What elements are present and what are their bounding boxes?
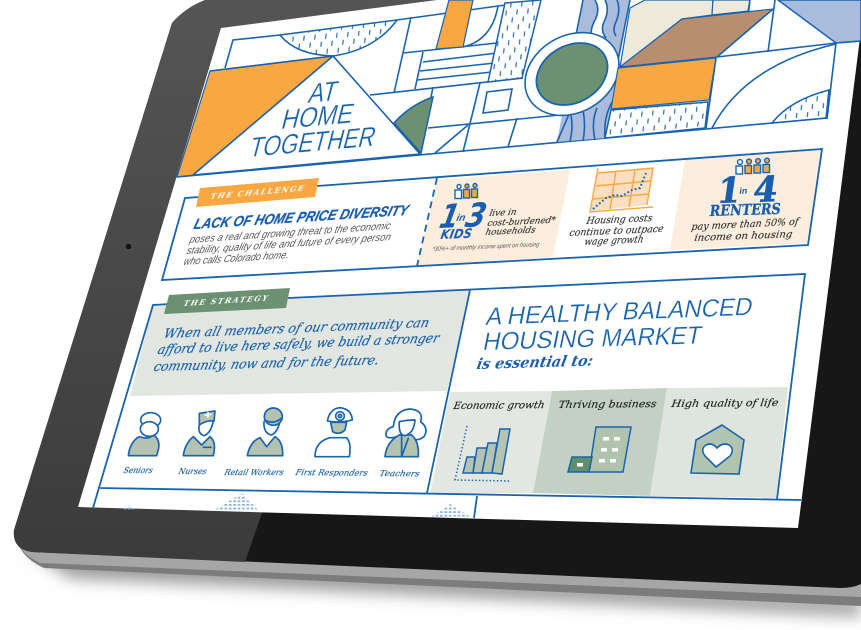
challenge heading: LACK OF HOME PRICE DIVERSITY (192, 203, 411, 233)
circle with green centre (510, 16, 634, 132)
stat: 1 in 3 kids: KIDS (439, 227, 473, 243)
cream walls (620, 0, 750, 67)
stat: 1 in 3 kids (436, 196, 490, 243)
panel: the strategy (93, 274, 805, 518)
stat: 1 in 4 renters: in (739, 186, 748, 196)
people labels: First Responders (294, 467, 369, 478)
strategy statement: afford to live here safely, we build a stronger (156, 331, 442, 358)
challenge body: stability, quality of life and future of every person (185, 231, 393, 257)
essential to: is essential to: (475, 352, 595, 373)
chart: housing costs vs wages (590, 168, 653, 212)
challenge body (182, 220, 393, 268)
text: cost-burdened households (484, 208, 557, 238)
essential labels: Economic growth (451, 400, 546, 412)
people labels: Teachers (379, 468, 421, 478)
text: pay more than 50 percent (691, 217, 801, 244)
icon: nurse (183, 411, 215, 456)
badge: the strategy (164, 288, 290, 314)
strategy sage panel (130, 290, 470, 396)
tan roof (620, 9, 773, 67)
strategy statement: community, now and for the future. (152, 353, 381, 375)
essential labels (451, 398, 779, 412)
text: housing costs (568, 213, 665, 248)
text: pay more than 50 percent: income on housing (694, 229, 793, 244)
stat: 1 in 4 renters: 1 (715, 170, 743, 212)
title: AT (305, 76, 341, 110)
people labels (122, 465, 421, 478)
dotted triangles at page bottom (123, 493, 472, 518)
stat: 1 in 3 kids: 1 (436, 197, 463, 236)
title: HOME (278, 98, 357, 136)
badge: the challenge (196, 178, 319, 207)
icon: house with heart (691, 425, 744, 474)
footnote: *30%+ of monthly income spent on housing (432, 241, 541, 253)
icon: first responder (315, 408, 352, 457)
icon: four people (736, 158, 770, 174)
right line work (706, 0, 861, 128)
stat: 1 in 3 kids: 3 (462, 196, 490, 235)
stat: 1 in 4 renters (708, 169, 782, 220)
illustration line work (177, 1, 827, 177)
panel: top illustration (177, 0, 861, 177)
badge: the challenge: THE CHALLENGE (209, 184, 307, 201)
orange wall (611, 58, 716, 109)
text: housing costs: wage growth (583, 234, 644, 248)
challenge body: who calls Colorado home. (182, 249, 290, 268)
challenge frame (162, 149, 822, 280)
camera lens (126, 244, 132, 250)
drop shadow under tablet (25, 548, 861, 616)
icon: teacher (385, 409, 426, 457)
peach panel: 1 in 3 (417, 170, 570, 266)
people labels: Seniors (122, 465, 154, 475)
icon: growth chart (455, 426, 511, 481)
white title triangle (193, 56, 420, 175)
panel: the challenge (162, 149, 822, 280)
peach panel: 1 in 4 (670, 150, 822, 250)
icons: people (128, 408, 426, 457)
stat: 1 in 3 kids: in (455, 213, 466, 224)
strategy frame (93, 274, 805, 518)
people labels: Nurses (177, 466, 208, 476)
title (246, 76, 379, 164)
orange triangle shape (177, 56, 333, 177)
market heading: HOUSING MARKET (481, 322, 704, 356)
blue roof corner (778, 0, 861, 43)
dotted base (605, 102, 708, 138)
dotted quarter circle (772, 90, 829, 123)
essential sections (430, 387, 788, 498)
essential labels: Thriving business (557, 399, 657, 411)
dashed divider (417, 178, 437, 266)
tablet screen (78, 0, 861, 528)
stat: 1 in 4 renters: RENTERS (708, 200, 782, 220)
dotted strip (488, 0, 541, 82)
icon: retail worker (247, 408, 283, 456)
text: cost-burdened households: live in (488, 208, 518, 219)
icon: senior (128, 413, 161, 456)
people labels: Retail Workers (223, 467, 285, 477)
title: TOGETHER (246, 121, 379, 164)
text: cost-burdened households: cost-burdened* (486, 216, 557, 229)
green triangle (394, 97, 433, 153)
market heading (481, 293, 755, 356)
badge: the strategy: THE STRATEGY (182, 294, 271, 308)
strategy statement: When all members of our community can (162, 316, 431, 342)
challenge body: poses a real and growing threat to the economic (187, 220, 393, 246)
market heading: A HEALTHY BALANCED (484, 293, 755, 331)
tablet silver edge (14, 530, 861, 606)
essential labels: High quality of life (669, 398, 779, 410)
icon: three people (455, 184, 478, 198)
strategy statement (152, 316, 442, 375)
text: housing costs: Housing costs (585, 213, 653, 227)
dotted bowl (280, 20, 397, 56)
orange top block (436, 0, 473, 49)
text: cost-burdened households: households (484, 226, 537, 238)
text: housing costs: continue to outpace (568, 224, 665, 239)
wavy river band (557, 0, 630, 142)
text: pay more than 50 percent: pay more than 50% of (691, 217, 801, 233)
stat: 1 in 4 renters: 4 (751, 169, 780, 211)
icon: building (568, 427, 631, 472)
